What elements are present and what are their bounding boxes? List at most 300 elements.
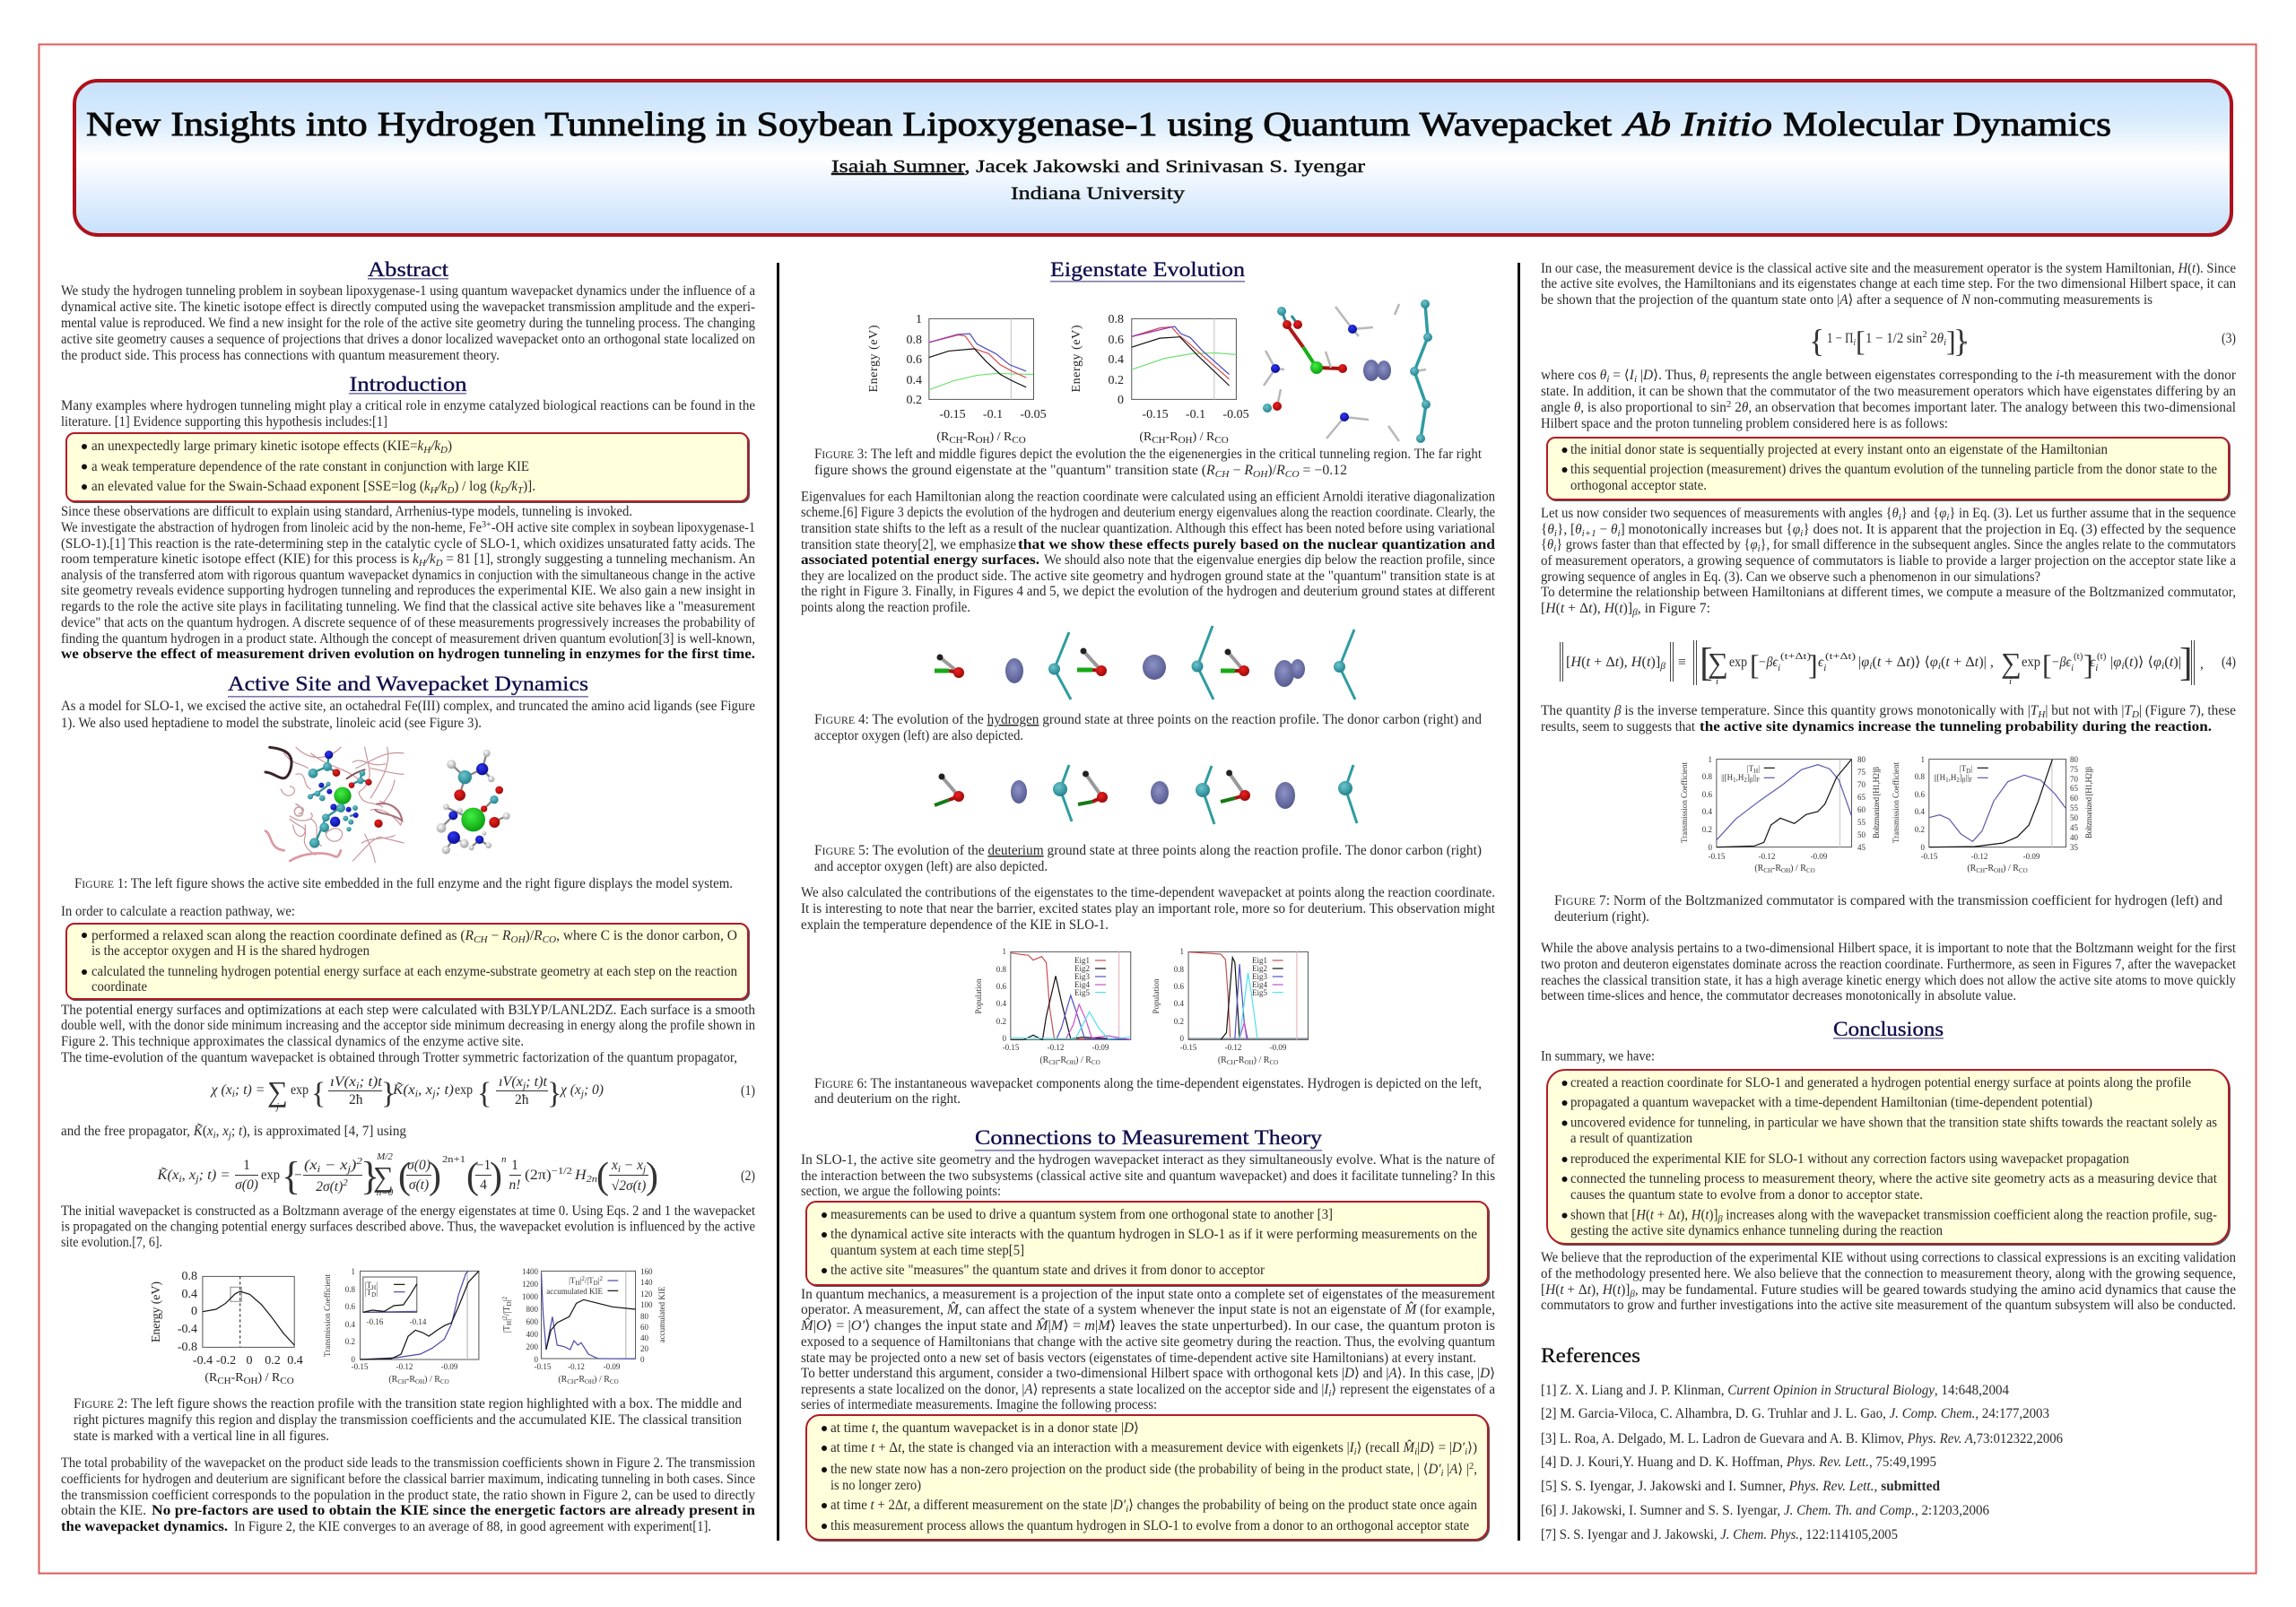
callout: measurement process: this measurement process allows the quantum hydrogen in SLO-1 to evolve from a donor to an orthogonal acceptor state	[831, 1518, 1469, 1533]
figure 7: deuterium commutator chart: ||	[1965, 773, 1969, 782]
analogy text	[1541, 368, 2236, 431]
sequences text: }, for small difference in the subsequent angles. Since the angles relate to the commutators	[1761, 537, 2236, 552]
intro text continued: D	[435, 558, 443, 569]
equation 2: 2	[356, 1156, 363, 1167]
conclusion text: β	[1629, 1289, 1635, 1299]
figure 7: hydrogen commutator chart: 1	[1733, 777, 1736, 784]
figure 3 caption: FIGURE 3: The left and middle figures depict the evolution the the eigenenergies in the critical tunneling region. The far right	[814, 447, 1483, 462]
figure 7: hydrogen commutator chart: |T	[1747, 764, 1753, 773]
callout: evidence: H	[422, 445, 431, 456]
equation 4: (t+Δt)	[1825, 651, 1856, 662]
figure 6: hydrogen population chart: Eig4	[1074, 980, 1090, 989]
equation 2: M/2	[376, 1151, 393, 1162]
figure 3 caption: R	[1275, 463, 1285, 478]
equation 2: (x	[304, 1158, 315, 1173]
intro text continued: (SLO-1).[1] This reaction is the rate-determining step in the catalytic cycle of SLO-1, which oxidizes unsaturated fatty acids. The	[61, 536, 755, 552]
figure 7: deuterium commutator chart: D	[1966, 768, 1970, 775]
heading: conclusions: Conclusions	[1833, 1018, 1944, 1040]
method text: The time-evolution of the quantum wavepacket is obtained through Trotter symmetric factorization of the quantum propagator,	[61, 1050, 737, 1065]
Hilbert space text: reaches the classical transition state, it has a high average kinetic energy which does not allow the active site atoms to move quickly	[1541, 973, 2236, 988]
figure 7: hydrogen commutator chart: β	[1750, 777, 1753, 784]
figure 2: accumulated KIE chart: /|T	[585, 1276, 594, 1285]
sequences text: } grows faster than that effected by {	[1556, 537, 1750, 552]
equation 4: [	[1700, 640, 1713, 684]
inverse temperature text: T	[2124, 703, 2133, 718]
figure 7: deuterium commutator chart: ) / R	[2003, 864, 2019, 873]
figure 7: deuterium commutator chart: (R	[1967, 864, 1976, 873]
equation 1: i	[356, 1081, 359, 1091]
pathway lead-in: In order to calculate a reaction pathway, we:	[61, 904, 295, 919]
equation 4: i	[1716, 676, 1718, 687]
figure 6: deuterium population chart: Eig4	[1252, 980, 1267, 989]
figure 7: deuterium commutator chart	[1892, 755, 2093, 874]
figure 3: deuterium eigenenergy chart: CH	[1152, 435, 1166, 446]
panel: eigenstate evolution	[801, 258, 1496, 1107]
figure 7: hydrogen commutator chart: F	[1756, 777, 1760, 784]
figure 6: hydrogen population chart: 0.8	[996, 965, 1006, 974]
intro text continued: -OH active site complex in soybean lipoxygenase-1	[491, 520, 755, 535]
analogy text: I	[1629, 368, 1635, 383]
figure 7: deuterium commutator chart: 55	[2070, 804, 2079, 812]
heading: active site: Active Site and Wavepacket Dynamics	[228, 673, 588, 695]
figure 3: deuterium eigenenergy chart: OH	[1178, 435, 1193, 446]
sequences text: i	[1618, 528, 1621, 539]
figure 7: hydrogen commutator chart: 2	[1744, 777, 1747, 784]
figure 7: hydrogen commutator chart: Boltzmanized [H1,H2]β	[1872, 767, 1881, 838]
abstract text: active site geometry causes a sequence of projections that drives a donor localized wavepacket onto an orthogonal state localized on	[61, 332, 755, 347]
figure 2: reaction profile chart: CO	[280, 1376, 294, 1386]
free propagator text: ;	[231, 1124, 239, 1139]
figure 6: hydrogen population chart: -0.12	[1048, 1043, 1064, 1052]
equation 2: {	[282, 1154, 300, 1198]
figure 5 caption: FIGURE 5: The evolution of the deuterium ground state at three points along the reaction profile. The donor carbon (right)	[814, 843, 1482, 858]
callout: argument points: the active site "measures" the quantum state and drives it from donor to acceptor	[831, 1263, 1265, 1278]
figure 2: reaction profile chart: ) / R	[258, 1371, 281, 1385]
inverse temperature text: | (Figure 7), these	[2139, 703, 2236, 718]
figure 2 caption: state is marked with a vertical line in all figures.	[74, 1429, 329, 1444]
equation 4: i	[2095, 663, 2098, 673]
callout: summary points: reproduced the experimental KIE for SLO-1 without any correction factors using wavepacket propagation	[1570, 1151, 2129, 1167]
callout: analogy: the initial donor state is sequentially projected at every instant onto an eigenstate of the Hamiltonian	[1570, 442, 2108, 457]
figure 2: accumulated KIE chart: -R	[576, 1375, 585, 1385]
figure 3 caption: R	[1243, 463, 1254, 478]
callout: argument points: measurements can be used to drive a quantum system from one orthogonal state to another [3]	[831, 1207, 1333, 1222]
figure 2: accumulated KIE chart: |	[502, 1319, 512, 1321]
figure 3 caption: OH	[1253, 469, 1269, 480]
callout: summary points: gesting the active site dynamics enhance tunneling during the reaction	[1570, 1223, 1943, 1238]
figure 6: hydrogen population chart: 0.6	[996, 982, 1006, 991]
figure 3: hydrogen eigenenergy chart: CO	[1012, 435, 1026, 446]
figure 3: deuterium eigenenergy chart: -0.15	[1142, 408, 1169, 421]
intro text continued: analysis of the transferred atom with rigorous quantum wavepacket dynamics in conjuction with the simultaneous change in the active	[61, 568, 755, 583]
callout: reaction pathway: performed a relaxed scan along the reaction coordinate defined as ( R	[91, 928, 474, 943]
equation 1: i	[232, 1089, 235, 1099]
figure 2 caption: right pictures magnify this region and display the transmission coefficients and the accumulated KIE. The classical transition	[74, 1412, 742, 1428]
equation 1: ; t)t	[526, 1074, 548, 1090]
method text	[61, 1003, 755, 1065]
intro text	[61, 398, 755, 430]
figure 2: accumulated KIE chart: H	[575, 1280, 579, 1287]
figure 7: deuterium commutator chart: 70	[2070, 775, 2079, 784]
intro text continued: finding the quantum hydrogen in a product state. Although the concept of measurement driven quantum evolution[3] is well-known,	[61, 631, 755, 647]
figure 7: hydrogen commutator chart: ||[H	[1721, 773, 1733, 782]
equation 2: ; t) =	[198, 1168, 230, 1183]
figure 3: hydrogen eigenenergy chart: ) / R	[990, 430, 1013, 444]
equation 3	[1809, 323, 2236, 359]
wavepacket text: site evolution.[7, 6].	[61, 1235, 162, 1250]
equation 2: − x	[621, 1158, 643, 1173]
figure 2: transmission coefficient chart: (R	[388, 1375, 397, 1385]
intro text continued: /k	[425, 552, 437, 567]
sequences text: of measurement operators, a growing sequence of commutators is liable to provide a larger projection on the acceptor state like a	[1541, 553, 2236, 569]
callout: reaction pathway: CO	[543, 934, 556, 945]
figure 2: accumulated KIE chart: 0	[535, 1355, 538, 1364]
figure 7: deuterium commutator chart: 0.2	[1915, 825, 1925, 834]
figure 2 caption: FIGURE 2: The left figure shows the reaction profile with the transition state region highlighted with a box. The middle and	[74, 1396, 742, 1412]
callout: analogy: this sequential projection (measurement) drives the quantum evolution of the tunneling particle from the donor state to the	[1570, 462, 2217, 477]
projection text: the active site evolves, the Hamiltonians and its eigenstates change at each time step. For the two dimensional Hilbert space, it can	[1541, 276, 2236, 291]
figure 7: hydrogen commutator chart: -0.12	[1759, 852, 1775, 861]
figure 6: hydrogen population chart: -R	[1057, 1055, 1066, 1065]
equation 4: (	[1872, 655, 1877, 670]
column divider right	[1518, 263, 1520, 1541]
equation 4: ≡	[1678, 655, 1686, 670]
figure 7: deuterium commutator chart: ,H	[1949, 773, 1957, 782]
callout: summary points: increases along with the wavepacket transmission coefficient along the reaction profile, sug-	[1723, 1207, 2217, 1223]
callout: evidence: )].	[523, 479, 535, 494]
figure 6: hydrogen population chart: Population	[974, 978, 983, 1014]
figure 2: transmission coefficient chart: -R	[406, 1375, 415, 1385]
callout: measurement process: is no longer zero)	[831, 1478, 921, 1493]
equation 1: j	[274, 1101, 279, 1112]
equation 1: ıV(x	[330, 1074, 353, 1090]
figure 7: hydrogen commutator chart: CO	[1806, 867, 1815, 874]
figure 4 caption: FIGURE 4: The evolution of the hydrogen ground state at three points on the reaction profile. The donor carbon (right) and	[814, 712, 1482, 727]
transmission text: The total probability of the wavepacket on the product side leads to the transmission coefficients shown in Figure 2. The transmission	[61, 1455, 755, 1471]
figure 2: transmission coefficient chart: H	[371, 1284, 376, 1291]
figure 2: transmission coefficient chart: |	[376, 1281, 378, 1290]
equation 2: −1/2	[552, 1166, 572, 1177]
free propagator text: and the free propagator, K̃(x	[61, 1124, 213, 1139]
intro text continued: device" that acts on the quantum hydrogen. A discrete sequence of of these measurements progressively increases the probability of	[61, 615, 756, 630]
figure 3: hydrogen eigenenergy chart: (R	[936, 430, 949, 444]
figure 6: deuterium population chart: -R	[1236, 1055, 1245, 1065]
figure 7: hydrogen commutator chart: 0	[1708, 843, 1713, 852]
title banner	[74, 81, 2233, 237]
figure 6: deuterium population chart	[1152, 947, 1308, 1066]
equation 1: }	[381, 1077, 396, 1110]
callout: measurement process: ⟩)	[1467, 1440, 1477, 1455]
figure 2: transmission coefficient chart: |T	[365, 1281, 371, 1290]
figure 3: deuterium eigenenergy chart: 0	[1118, 394, 1124, 407]
equation 1	[209, 1074, 755, 1112]
equation 4: (	[1941, 655, 1945, 670]
figure 7: deuterium commutator chart: Transmission Coefficient	[1892, 762, 1900, 843]
figure 1: enzyme and model system	[265, 747, 510, 863]
equation 1: K̃(x	[393, 1082, 413, 1098]
figure 2: reaction profile chart: -0.8	[178, 1341, 197, 1354]
figure 2: accumulated KIE chart: |	[502, 1299, 512, 1301]
equation 3: i	[1853, 337, 1856, 348]
sequences text	[1541, 506, 2236, 618]
figure 7: hydrogen commutator chart: (R	[1754, 864, 1763, 873]
sequences text: i	[1553, 543, 1556, 554]
figure 2: reaction profile chart: 0.4	[287, 1354, 303, 1368]
callout: measurement process: ,	[1474, 1462, 1477, 1477]
intro text: literature. [1] Evidence supporting this hypothesis includes:[1]	[61, 414, 387, 430]
figure 7: deuterium commutator chart: 65	[2070, 784, 2079, 793]
analogy text: state. In addition, it can be shown that the commutator of the two measurement operators which have eigenstates differing by an	[1541, 384, 2236, 399]
callout: measurement process: ⟩ changes the probability of being on the product state once again	[1128, 1498, 1477, 1513]
eigenvalue text: We should also note that the eigenvalue energies dip below the reaction profile, since	[1044, 552, 1495, 568]
reference list: [7] S. S. Iyengar and J. Jakowski, J. Chem. Phys., 122:114105,2005	[1541, 1527, 1898, 1542]
figure 3: deuterium eigenenergy chart: -R	[1166, 430, 1178, 444]
equation 2: 1	[511, 1158, 518, 1173]
figure 6: deuterium population chart: Eig1	[1252, 956, 1267, 965]
figure 2: reaction profile chart: (R	[204, 1371, 217, 1385]
figure 6: deuterium population chart: 0.4	[1174, 999, 1184, 1008]
measurement text: exposed to a sequence of Hamiltonians that change with the active site geometry during the reaction. Thus, the evolving quantum	[801, 1334, 1495, 1350]
Hilbert space text: between time-slices and hence, the commutator decreases monotonically in absolute value.	[1541, 988, 2016, 1003]
figure 6: deuterium population chart: Eig2	[1252, 964, 1267, 973]
equation 2: , x	[182, 1168, 196, 1183]
reference list: [3] L. Roa, A. Delgado, M. L. Ladron de Guevara and A. B. Klimov, Phys. Rev. A,73:012322,2006	[1541, 1431, 2063, 1446]
equation 2: j	[345, 1164, 351, 1175]
title: Ab Initio	[1621, 106, 1772, 143]
equation 2: x	[612, 1158, 618, 1173]
figure 2: accumulated KIE chart: |T	[502, 1325, 512, 1333]
contributions text: It is interesting to note that near the barrier, excited states play an important role, more so for deuterium. This observation might	[801, 901, 1496, 916]
equation 4: t + Δt)| ,	[1945, 655, 1993, 670]
equation 4: (t+Δt)	[1780, 651, 1811, 662]
figure 3: hydrogen eigenenergy chart: -R	[963, 430, 976, 444]
measurement text: M̂|O⟩ = |O′⟩ changes the input state and M̂|M⟩ = m|M⟩ leaves the state unperturbed). In our case, the quantum proton is	[800, 1318, 1495, 1333]
figure 6: deuterium population chart: -0.15	[1180, 1043, 1197, 1052]
figure 7: deuterium commutator chart: 80	[2070, 755, 2079, 764]
abstract text: dynamical active site. The kinetic isotope effect is directly computed using the wavepacket transmission amplitude and the experi-	[61, 300, 755, 315]
sequences text: θ	[1611, 522, 1618, 537]
figure 2 caption	[74, 1396, 742, 1444]
projection text: In our case, the measurement device is the classical active site and the measurement operator is the system Hamiltonian, H(t). Since	[1541, 261, 2236, 276]
figure 7: hydrogen commutator chart: 1	[1708, 755, 1712, 764]
equation 4: ]	[2179, 640, 2193, 684]
figure 7: hydrogen commutator chart: 0.6	[1702, 790, 1713, 799]
sequences text: , in Figure 7:	[1638, 601, 1710, 616]
equation 1: 2ħ	[349, 1092, 363, 1108]
figure 2: accumulated KIE chart: 400	[526, 1330, 538, 1339]
enzyme ribbons	[265, 747, 404, 863]
callout: reaction pathway: calculated the tunneling hydrogen potential energy surface at each enzyme-substrate geometry at each step on the reaction	[91, 964, 737, 979]
eigenvalue text: Eigenvalues for each Hamiltonian along the reaction coordinate were calculated using an efficient Arnoldi iterative diagonalization	[801, 490, 1495, 504]
figure 7: deuterium commutator chart: 50	[2070, 813, 2079, 822]
connections text: the interaction between the two subsystems (classical active site and quantum wavepacket) and does it facilitate tunneling? In this	[801, 1168, 1495, 1184]
figure 7: hydrogen commutator chart: 50	[1857, 830, 1866, 839]
figure 2: accumulated KIE chart: 140	[640, 1278, 653, 1287]
figure 7: deuterium commutator chart: β	[1962, 777, 1966, 784]
figure 7: hydrogen commutator chart: ]	[1747, 773, 1750, 782]
eigenvalue text: scheme.[6] Figure 3 depicts the evolution of the hydrogen and deuterium energy eigenvalues along the reaction coordinate. Clearly, the	[801, 505, 1495, 520]
analogy text: i	[1634, 374, 1637, 385]
measurement text: i	[1328, 1388, 1331, 1399]
figure 2: accumulated KIE chart: |T	[569, 1276, 575, 1285]
figure 2: transmission coefficient chart: -0.14	[410, 1317, 427, 1326]
heading: references: References	[1541, 1344, 1640, 1367]
transmission text: the wavepacket dynamics.	[61, 1519, 228, 1534]
figure 6: hydrogen population chart: 1	[1003, 947, 1006, 956]
figure 2: accumulated KIE chart: 2	[599, 1275, 603, 1282]
figure 6: deuterium population chart: CO	[1269, 1059, 1278, 1066]
equation 3: {	[1809, 323, 1824, 359]
equation 4: (t)	[2097, 651, 2107, 662]
figure 2: reaction profile chart: OH	[244, 1376, 258, 1386]
equation 3: θ	[1937, 331, 1944, 346]
figure 6: deuterium population chart: 0.2	[1174, 1017, 1184, 1026]
projection text: be shown that the projection of the quantum state onto |A⟩ after a sequence of N non-commuting measurements is	[1541, 292, 2152, 308]
callout: measurement process: at time t + 2Δt, a different measurement on the state |D′	[831, 1498, 1126, 1513]
sequences text: ] monotonically increases but {	[1621, 522, 1793, 537]
analogy text: Hilbert space and the proton tunneling problem considered here is as follows:	[1541, 416, 1948, 431]
analogy text: angle θ, is also proportional to sin	[1541, 400, 1726, 415]
method text: The potential energy surfaces and optimizations at each step were calculated with B3LYP/LANL2DZ. Each surface is a smooth	[61, 1003, 755, 1018]
figure 6: hydrogen population chart: -0.15	[1003, 1043, 1020, 1052]
authors: Isaiah Sumner , Jacek Jakowski and Srinivasan S. Iyengar	[831, 157, 1365, 177]
figure 2: accumulated KIE chart: 1400	[522, 1267, 538, 1276]
callout: argument points: quantum system at each time step[5]	[831, 1243, 1024, 1258]
callout: summary points: connected the tunneling process to measurement theory, where the active site geometry acts as a measuring device that	[1570, 1171, 2218, 1186]
figure 2: transmission coefficient chart: D	[371, 1291, 376, 1299]
figure 2: transmission coefficient chart: CO	[440, 1378, 449, 1385]
sequences text: φ	[1750, 537, 1758, 552]
connections text: section, we argue the following points:	[801, 1184, 1001, 1199]
analogy text: i	[1606, 374, 1609, 385]
column divider left	[777, 263, 779, 1541]
equation 4: ϵ	[1818, 655, 1823, 670]
projection text	[1541, 261, 2236, 308]
callout: reaction pathway: is the acceptor oxygen and H is the shared hydrogen	[91, 943, 370, 959]
enzyme atoms	[308, 751, 383, 848]
figure 3: deuterium eigenenergy chart: Energy (eV)	[1070, 325, 1083, 393]
figure 7: deuterium commutator chart: -0.12	[1971, 852, 1987, 861]
equation 1: {	[477, 1077, 491, 1110]
eigenvalue text: that we show these effects purely based on the nuclear quantization and	[1018, 537, 1496, 552]
equation 4	[1560, 640, 2236, 687]
heading: connections: Connections to Measurement Theory	[975, 1126, 1323, 1149]
callout: analogy	[1547, 438, 2231, 501]
figure 2: transmission coefficient chart: ) / R	[424, 1375, 440, 1385]
figure 7: hydrogen commutator chart: -0.09	[1811, 852, 1828, 861]
figure 6: hydrogen population chart: CH	[1048, 1059, 1057, 1066]
figure 7: deuterium commutator chart: F	[1969, 777, 1972, 784]
equation 3: ,	[1964, 331, 1968, 346]
figure 1 caption: FIGURE 1: The left figure shows the active site embedded in the full enzyme and the right figure displays the model system.	[74, 876, 733, 891]
intro text continued: we observe the effect of measurement driven evolution on hydrogen tunneling in enzymes for the first time.	[61, 647, 755, 662]
analogy text: D⟩. Thus, θ	[1643, 368, 1706, 383]
equation 2: √2σ(t)	[612, 1178, 646, 1194]
sequences text: i	[1899, 512, 1901, 523]
figure 3: deuterium eigenenergy chart: 0.6	[1109, 334, 1124, 347]
equation 4: i	[2121, 661, 2125, 672]
equation 3: [	[1856, 325, 1866, 357]
measurement text: state may be projected onto a new set of basis vectors (eigenstates of time-dependent active site Hamiltonians) at every instant.	[801, 1351, 1476, 1366]
equation 4: i	[1938, 661, 1941, 672]
model system	[437, 750, 510, 854]
intro text continued: regards to the role the active site plays in facilitating tunneling. We find that the classical active site behaves like a "measurement	[61, 599, 756, 614]
equation 2: (	[398, 1156, 411, 1197]
figure 2: accumulated KIE chart: accumulated KIE	[546, 1287, 604, 1296]
intro text continued: H	[418, 558, 427, 569]
analogy text: 2	[1731, 400, 1742, 415]
callout: measurement process: D⟩ = |D′	[1420, 1440, 1465, 1455]
figure 7: hydrogen commutator chart: CH	[1763, 867, 1772, 874]
figure 2: transmission coefficient chart: -0.16	[367, 1317, 384, 1326]
reference list: [2] M. Garcia-Viloca, C. Alhambra, D. G. Truhlar and J. L. Gao, J. Comp. Chem., 24:177,2003	[1541, 1406, 2049, 1421]
equation 2: )	[646, 1156, 658, 1197]
equation 1: j	[521, 1081, 526, 1091]
figure 3: hydrogen eigenenergy chart: Energy (eV)	[867, 325, 881, 393]
conclusion text: of the methodology presented here. We also believe that the connection to measurement theory, along with the growing sequence,	[1541, 1266, 2236, 1281]
figure 2: accumulated KIE chart: 100	[640, 1300, 653, 1309]
figure 7: deuterium commutator chart: 45	[2070, 823, 2079, 832]
eigenvalue text: points along the reaction profile.	[801, 600, 970, 615]
figure 7 caption	[1554, 893, 2222, 925]
inverse temperature text: the active site dynamics increase the tunneling probability during the reaction.	[1700, 719, 2212, 734]
equation 3: 1 − 1/2 sin	[1866, 331, 1925, 346]
model text: As a model for SLO-1, we excised the active site, an octahedral Fe(III) complex, and truncated the amino acid ligands (see Figure	[61, 699, 755, 714]
callout: measurement process: |	[1444, 1462, 1449, 1477]
equation 3: i	[1944, 337, 1946, 348]
title: Molecular Dynamics	[1783, 106, 2111, 143]
figure 2: accumulated KIE chart: 1200	[522, 1280, 538, 1289]
callout: evidence: /k	[437, 479, 448, 494]
figure 6: deuterium population chart: 0.8	[1174, 965, 1184, 974]
Hilbert space text: two proton and deuteron eigenstates dominate across the reaction coordinate. Furthermore, as seen in Figures 7, after the wavepacket	[1541, 957, 2237, 972]
callout: measurement process: i	[1414, 1446, 1417, 1457]
figure 3: hydrogen eigenenergy chart: -0.15	[939, 408, 966, 421]
equation 2: n!	[509, 1177, 520, 1193]
figure 2: accumulated KIE chart: -0.15	[535, 1362, 552, 1371]
conclusion text: commutators to grow and further investigations into the active site measurement of the quantum subsystem will also be conducted.	[1541, 1298, 2236, 1313]
figure 7: deuterium commutator chart: -0.09	[2023, 852, 2040, 861]
figure 2: transmission coefficient chart: |	[376, 1288, 378, 1297]
measurement text: ⟩ represent the eigenstates of a	[1331, 1382, 1495, 1397]
equation 2: n	[501, 1154, 507, 1165]
figure 7: deuterium commutator chart: |T	[1960, 764, 1966, 773]
callout: summary points: uncovered evidence for tunneling, in particular we have shown that the transition state shifts towards the reactant solely as	[1570, 1116, 2217, 1130]
figure 2: transmission coefficient chart: 0.6	[345, 1302, 355, 1311]
callout: evidence: k	[494, 479, 501, 494]
inverse temperature text	[1541, 703, 2236, 734]
figure 6: deuterium population chart: 1	[1180, 947, 1184, 956]
wavepacket text: The initial wavepacket is constructed as a Boltzmann average of the energy eigenstates at time 0. Using Eqs. 2 and 1 the wavepacket	[61, 1203, 756, 1219]
figure 7: hydrogen commutator chart: Transmission Coefficient	[1680, 762, 1689, 843]
sequences text: φ	[1793, 522, 1801, 537]
figure 6: hydrogen population chart: 0.2	[996, 1017, 1006, 1026]
figure 2: reaction profile chart: -R	[231, 1371, 244, 1385]
figure 2: transmission coefficient chart: 0.8	[345, 1285, 355, 1294]
figure 2: reaction profile chart: 0.8	[181, 1270, 197, 1283]
figure 3: deuterium eigenenergy chart: 0.4	[1109, 353, 1124, 367]
measurement text: To better understand this argument, consider a two-dimensional Hilbert space with orthogonal kets |D⟩ and |A⟩. In this case, |D⟩	[801, 1366, 1495, 1381]
sequences text: } does not. It is apparent that the projection in Eq. (3) effected by the sequence	[1803, 522, 2236, 537]
transmission text: No pre-factors are used to obtain the KIE since the energetic factors are already present in	[152, 1503, 756, 1518]
intro text continued: site geometry reveals evidence supporting hydrogen tunneling and reproduces the experimental KIE. We also gain a new insight in	[61, 583, 755, 598]
figure 2: accumulated KIE chart: ) / R	[594, 1375, 610, 1385]
connections text: In SLO-1, the active site geometry and the hydrogen wavepacket interact as they simultaneously evolve. What is the nature of	[801, 1152, 1496, 1168]
figure 2: reaction profile chart: 0.2	[265, 1354, 281, 1368]
callout: reaction pathway: )/	[526, 928, 535, 943]
figure 7: deuterium commutator chart: 0.4	[1915, 807, 1925, 816]
sequences text: }, [	[1557, 522, 1575, 537]
